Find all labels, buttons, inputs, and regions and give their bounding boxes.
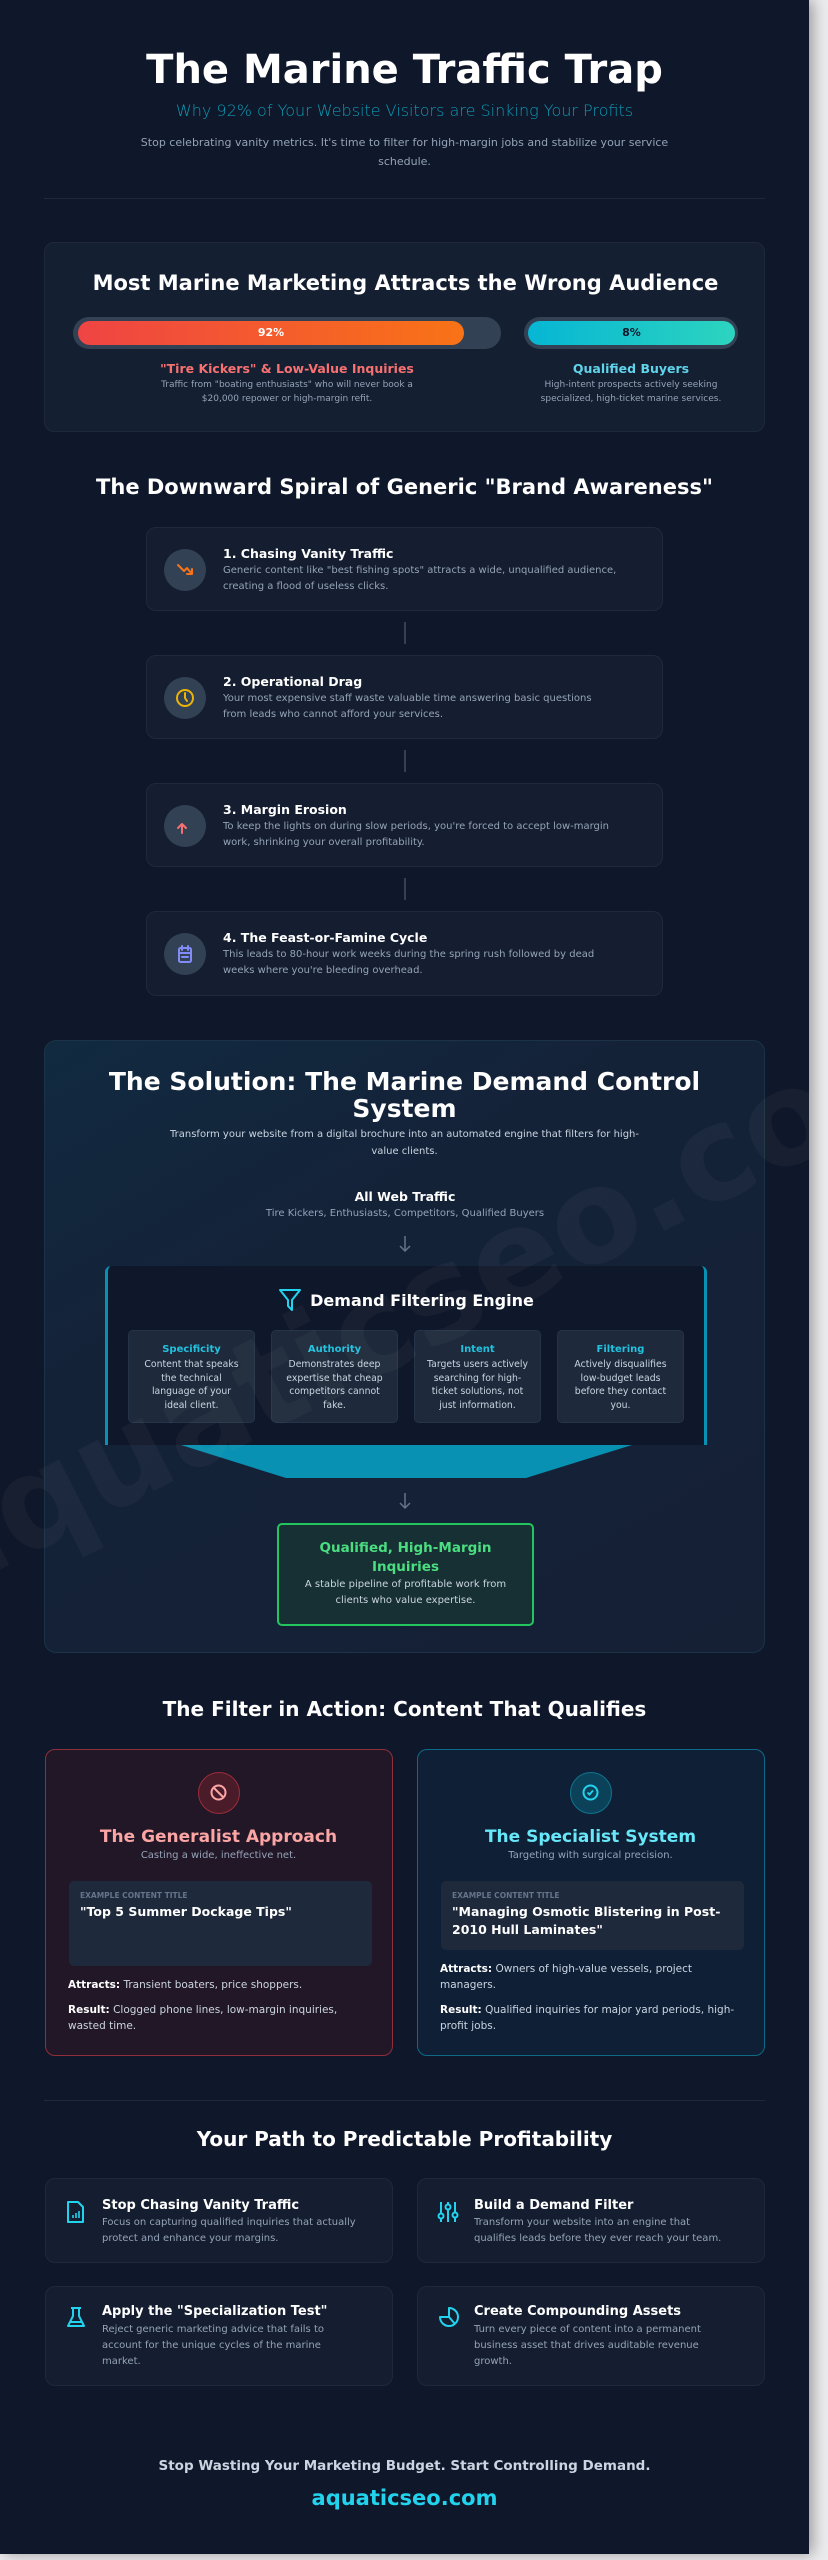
pillar: authority: fake. xyxy=(323,1400,346,1410)
input: all web traffic xyxy=(266,1189,544,1219)
step card: demand filter: qualifies leads before they ever reach your team. xyxy=(474,2233,721,2244)
step 3 xyxy=(146,783,663,867)
pillar: filtering xyxy=(557,1330,684,1423)
heading xyxy=(109,1067,700,1123)
heading: Most Marine Marketing Attracts the Wrong Audience xyxy=(93,271,718,295)
step 1: 1. Chasing Vanity Traffic xyxy=(223,546,393,561)
pillar: intent: ticket solutions, not xyxy=(432,1386,523,1397)
step 4: 4. The Feast-or-Famine Cycle xyxy=(223,930,427,945)
card: generalist: Casting a wide, ineffective net. xyxy=(141,1850,296,1861)
bar: 8%: 8% xyxy=(622,326,641,339)
pillar: specificity: Content that speaks xyxy=(144,1359,239,1370)
example title xyxy=(441,1881,744,1950)
pillar: intent: Targets users actively xyxy=(427,1359,528,1370)
step 2 xyxy=(146,655,663,739)
card: specialist xyxy=(417,1749,765,2056)
step card: stop chasing: protect and enhance your margins. xyxy=(102,2233,278,2244)
card: specialist: Result: Qualified inquiries for major yard periods, high- xyxy=(440,2004,734,2016)
step 4: weeks where you're bleeding overhead. xyxy=(223,965,423,976)
label: tire kickers: "Tire Kickers" & Low-Value Inquiries xyxy=(160,361,414,376)
heading: The Solution: The Marine Demand Control xyxy=(109,1067,700,1096)
pillar: specificity: Specificity xyxy=(162,1344,221,1355)
card: specialist: profit jobs. xyxy=(440,2020,496,2032)
icon: ban xyxy=(198,1772,240,1814)
brand url: aquaticseo.com xyxy=(312,2486,497,2510)
output: qualified inquiries: Inquiries xyxy=(372,1559,439,1575)
intro text: Stop celebrating vanity metrics. It's time to filter for high-margin jobs and stabilize your service xyxy=(141,136,668,149)
label: tire kickers xyxy=(160,361,414,404)
heading: downward spiral: The Downward Spiral of Generic "Brand Awareness" xyxy=(96,475,713,499)
icon: calendar xyxy=(164,933,206,975)
pillar: intent: Intent xyxy=(460,1344,495,1355)
icon: arrow up xyxy=(164,805,206,847)
subtitle: Why 92% of Your Website Visitors are Sinking Your Profits xyxy=(176,101,633,120)
example title xyxy=(69,1881,372,1966)
step 4 xyxy=(146,911,663,996)
step card: demand filter: Transform your website into an engine that xyxy=(474,2217,690,2228)
input: all web traffic: Tire Kickers, Enthusiasts, Competitors, Qualified Buyers xyxy=(266,1208,544,1219)
card: generalist xyxy=(45,1749,393,2056)
icon: trending down xyxy=(164,549,206,591)
icon: flask xyxy=(67,2307,85,2327)
output: qualified inquiries: Qualified, High-Margin xyxy=(319,1540,492,1556)
output: qualified inquiries xyxy=(277,1523,534,1626)
pillar: authority: expertise that cheap xyxy=(286,1372,383,1384)
footer xyxy=(158,2458,650,2510)
pillar: specificity: language of your xyxy=(152,1386,231,1397)
intro text: schedule. xyxy=(378,155,431,168)
header xyxy=(141,47,668,168)
step card: compounding assets xyxy=(417,2286,765,2386)
step card: specialization test: market. xyxy=(102,2356,141,2367)
label: qualified buyers: specialized, high-ticket marine services. xyxy=(541,394,721,404)
card: specialist: The Specialist System xyxy=(485,1827,696,1847)
pillar: filtering: Filtering xyxy=(597,1344,644,1355)
step card: specialization test: Reject generic marketing advice that fails to xyxy=(102,2324,324,2335)
step card: demand filter: Build a Demand Filter xyxy=(474,2198,633,2213)
step card: specialization test xyxy=(45,2286,393,2386)
pillar: intent xyxy=(414,1330,541,1423)
step card: compounding assets: Create Compounding Assets xyxy=(474,2304,681,2319)
pillar: filtering: low-budget leads xyxy=(581,1372,660,1384)
output: qualified inquiries: A stable pipeline of profitable work from xyxy=(305,1579,506,1590)
heading: System xyxy=(352,1094,457,1123)
pillar: authority: competitors cannot xyxy=(289,1386,380,1397)
engine title: Demand Filtering Engine xyxy=(310,1290,534,1310)
engine box xyxy=(105,1266,707,1445)
pillar: authority xyxy=(271,1330,398,1423)
card: generalist: The Generalist Approach xyxy=(100,1827,337,1847)
icon: sliders xyxy=(438,2202,458,2222)
step 2: 2. Operational Drag xyxy=(223,674,362,689)
step card: stop chasing: Focus on capturing qualified inquiries that actually xyxy=(102,2217,356,2228)
example title: EXAMPLE CONTENT TITLE xyxy=(452,1891,560,1900)
step 3: work, shrinking your overall profitability. xyxy=(223,837,425,848)
pillar: filtering: before they contact xyxy=(575,1386,666,1397)
subheading: value clients. xyxy=(371,1146,438,1157)
output: qualified inquiries: clients who value expertise. xyxy=(336,1595,475,1606)
step 1: creating a flood of useless clicks. xyxy=(223,581,388,592)
subheading: Transform your website from a digital brochure into an automated engine that filters for high- xyxy=(170,1129,639,1140)
panel: solution xyxy=(44,1040,765,1653)
card: specialist: Targeting with surgical precision. xyxy=(508,1850,673,1861)
bar: 92%: 92% xyxy=(258,326,284,339)
card: generalist: wasted time. xyxy=(68,2020,136,2032)
step 3: To keep the lights on during slow periods, you're forced to accept low-margin xyxy=(223,821,609,832)
step card: specialization test: account for the unique cycles of the marine xyxy=(102,2340,321,2351)
icon: file chart xyxy=(67,2201,84,2223)
pillar: specificity xyxy=(128,1330,255,1423)
pillar: intent: just information. xyxy=(439,1400,516,1410)
step card: stop chasing xyxy=(45,2178,393,2263)
pillar: authority: Authority xyxy=(308,1344,361,1355)
heading: filter in action: The Filter in Action: Content That Qualifies xyxy=(163,1697,646,1721)
label: qualified buyers: Qualified Buyers xyxy=(573,361,689,376)
arrow xyxy=(400,1493,410,1509)
label: tire kickers: Traffic from "boating enthusiasts" who will never book a xyxy=(161,380,413,390)
step 2: from leads who cannot afford your services. xyxy=(223,709,443,720)
heading: path to profitability: Your Path to Predictable Profitability xyxy=(197,2127,612,2151)
label: qualified buyers: High-intent prospects actively seeking xyxy=(545,380,717,390)
step card: compounding assets: Turn every piece of content into a permanent xyxy=(474,2324,701,2335)
example title: "Top 5 Summer Dockage Tips" xyxy=(80,1904,292,1919)
funnel trapezoid xyxy=(181,1445,632,1478)
card: generalist: Attracts: Transient boaters, price shoppers. xyxy=(68,1979,302,1991)
arrow xyxy=(400,1236,410,1252)
step 1 xyxy=(146,527,663,611)
step card: compounding assets: growth. xyxy=(474,2356,512,2367)
step card: specialization test: Apply the "Specialization Test" xyxy=(102,2304,327,2319)
panel: wrong audience xyxy=(44,242,765,432)
pillar: authority: Demonstrates deep xyxy=(289,1359,380,1370)
icon: pie xyxy=(439,2307,459,2327)
pillar: intent: searching for high- xyxy=(434,1372,521,1384)
intro text xyxy=(141,136,668,168)
input: all web traffic: All Web Traffic xyxy=(355,1189,455,1204)
step card: demand filter xyxy=(417,2178,765,2263)
bar: 8% xyxy=(524,317,738,349)
example title: EXAMPLE CONTENT TITLE xyxy=(80,1891,188,1900)
step 1: Generic content like "best fishing spots" attracts a wide, unqualified audience, xyxy=(223,565,616,576)
footer: Stop Wasting Your Marketing Budget. Start Controlling Demand. xyxy=(158,2458,650,2474)
card: specialist: managers. xyxy=(440,1979,496,1991)
pillar: specificity: ideal client. xyxy=(165,1400,218,1410)
step card: stop chasing: Stop Chasing Vanity Traffic xyxy=(102,2198,299,2213)
example title: 2010 Hull Laminates" xyxy=(452,1922,603,1937)
label: qualified buyers xyxy=(541,361,721,404)
card: generalist: Result: Clogged phone lines, low-margin inquiries, xyxy=(68,2004,337,2016)
pillar: specificity: the technical xyxy=(161,1372,222,1384)
icon: clock xyxy=(164,677,206,719)
step 4: This leads to 80-hour work weeks during the spring rush followed by dead xyxy=(223,949,594,960)
step 3: 3. Margin Erosion xyxy=(223,802,347,817)
pillar: filtering: you. xyxy=(610,1400,631,1410)
card: specialist: Attracts: Owners of high-value vessels, project xyxy=(440,1963,692,1975)
step 2: Your most expensive staff waste valuable time answering basic questions xyxy=(223,693,592,704)
label: tire kickers: $20,000 repower or high-margin refit. xyxy=(202,394,372,404)
pillar: filtering: Actively disqualifies xyxy=(574,1359,667,1370)
title: The Marine Traffic Trap xyxy=(146,47,663,93)
example title: "Managing Osmotic Blistering in Post- xyxy=(452,1904,720,1919)
step card: compounding assets: business asset that drives auditable revenue xyxy=(474,2340,699,2351)
bar: 92% xyxy=(73,317,501,349)
icon: check xyxy=(570,1772,612,1814)
subheading xyxy=(170,1129,639,1157)
